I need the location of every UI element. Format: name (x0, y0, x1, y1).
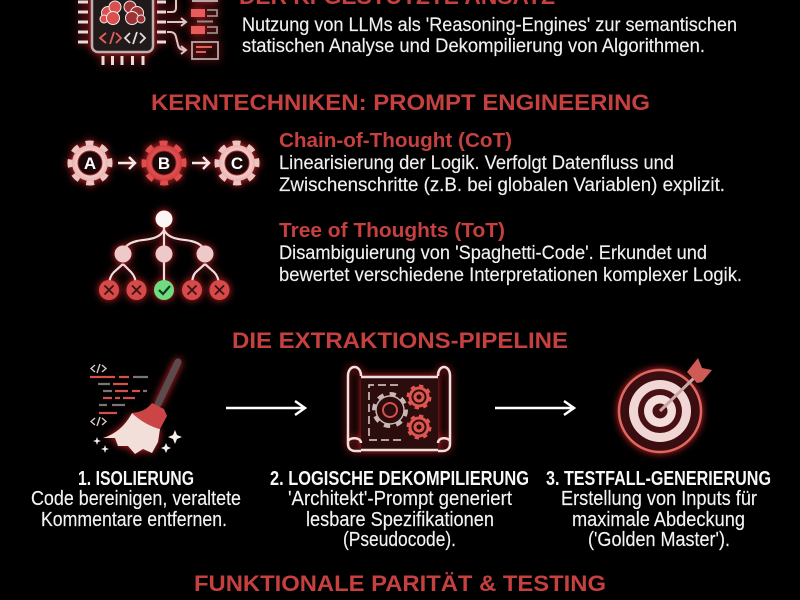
gear A (71, 144, 109, 182)
gear C: C (231, 154, 243, 173)
chip pins (78, 2, 166, 65)
broom ferrule (132, 403, 167, 429)
text: approach description (242, 15, 737, 57)
output blocks (191, 0, 218, 59)
arrow A to B (118, 157, 135, 169)
broom handle (158, 362, 178, 404)
heading: Chain-of-Thought: Chain-of-Thought (CoT) (279, 130, 512, 152)
gear B: B (158, 154, 170, 173)
step 3: Testfall-Generierung: ('Golden Master'). (588, 528, 730, 551)
gear A: A (84, 154, 96, 173)
icon: tree of thoughts (99, 210, 230, 300)
text: CoT description: Linearisierung der Logik. Verfolgt Datenfluss und (279, 153, 674, 174)
code lines (90, 377, 148, 413)
step 1: Isolierung: Code bereinigen, veraltete (31, 487, 241, 510)
step 2: Logische Dekompilierung: 'Architekt'-Prompt generiert (288, 487, 512, 510)
icon: AI chip with brain and outputs (78, 0, 218, 65)
heading: Tree of Thoughts: Tree of Thoughts (ToT) (279, 220, 505, 242)
heading: Kerntechniken: KERNTECHNIKEN: PROMPT ENGINEERING (151, 90, 650, 115)
red gears (408, 386, 430, 438)
arrow B to C (192, 157, 209, 169)
text: approach description: Nutzung von LLMs als 'Reasoning-Engines' zur semantischen (242, 15, 737, 36)
text: CoT description: Zwischenschritte (z.B. bei globalen Variablen) explizit. (279, 175, 725, 196)
gear B (145, 144, 183, 182)
arrow: step 2 to step 3 (495, 401, 574, 415)
step 3: Testfall-Generierung: maximale Abdeckung (572, 508, 745, 531)
output arrows (167, 0, 186, 54)
text: CoT description (279, 153, 725, 196)
step 3: Testfall-Generierung: Erstellung von Inputs für (561, 487, 757, 510)
rejected leaves (99, 280, 230, 300)
arrow: step 1 to step 2 (226, 401, 305, 415)
accepted leaf (154, 280, 174, 300)
icon: chain of thought gears (71, 144, 256, 182)
step 3: Testfall-Generierung (546, 468, 771, 551)
step 2: Logische Dekompilierung: 2. LOGISCHE DEKOMPILIERUNG (270, 468, 529, 490)
root node (156, 210, 172, 228)
heading: Funktionale Parität: FUNKTIONALE PARITÄT & TESTING (194, 571, 606, 596)
text: ToT description: bewertet verschiedene Interpretationen komplexer Logik. (279, 265, 742, 286)
tree branches (109, 219, 219, 290)
step 1: Isolierung (31, 468, 241, 531)
icon: broom sweeping code (90, 362, 182, 454)
broom bristles (103, 413, 160, 454)
blueprint scroll (348, 367, 450, 451)
sparkles (93, 430, 182, 453)
code tags (91, 364, 106, 426)
text: approach description: statischen Analyse und Dekompilierung von Algorithmen. (242, 36, 705, 57)
heading: Extraktions-Pipeline: DIE EXTRAKTIONS-PIPELINE (232, 328, 568, 353)
middle nodes (114, 246, 214, 262)
gear C (218, 144, 256, 182)
step 1: Isolierung: 1. ISOLIERUNG (78, 468, 194, 490)
dashed outline (369, 385, 402, 440)
text: ToT description (279, 243, 742, 286)
code brackets (100, 32, 145, 44)
text: ToT description: Disambiguierung von 'Spaghetti-Code'. Erkundet und (279, 243, 707, 264)
step 2: Logische Dekompilierung: (Pseudocode). (343, 528, 456, 551)
chip body (92, 0, 153, 52)
brain (100, 1, 145, 24)
step 1: Isolierung: Kommentare entfernen. (41, 508, 227, 531)
icon: target with arrow (619, 358, 712, 452)
target arrow (660, 358, 712, 411)
step 2: Logische Dekompilierung: lesbare Spezifikationen (306, 508, 494, 531)
central gear (374, 394, 406, 426)
target rings (619, 370, 701, 452)
icon: blueprint with gears (348, 367, 450, 451)
step 2: Logische Dekompilierung (270, 468, 529, 551)
